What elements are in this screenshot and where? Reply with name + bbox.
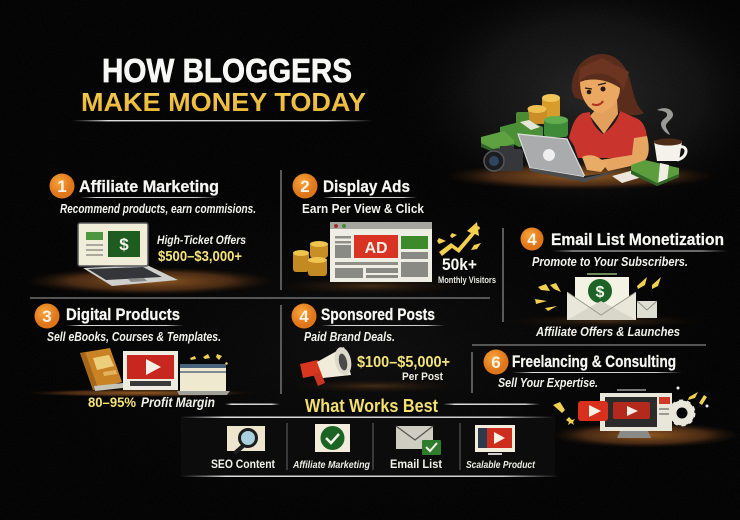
coin stacks and cash	[481, 94, 568, 152]
heading: Display Ads	[323, 178, 410, 196]
badge 4	[520, 228, 544, 250]
subtitle: Promote to Your Subscribers.	[532, 255, 688, 269]
caption: Affiliate Offers & Launches	[535, 324, 680, 339]
subtitle: Recommend products, earn commisions.	[60, 202, 256, 216]
icon: laptop with dollar	[78, 223, 178, 286]
cash stack and card	[612, 160, 679, 186]
badge 2	[292, 174, 318, 198]
badge 1	[50, 174, 74, 198]
subtitle: Sell eBooks, Courses & Templates.	[47, 330, 221, 344]
stat	[88, 394, 215, 410]
title	[72, 52, 373, 121]
stat: 50k+	[442, 255, 477, 274]
heading: Affiliate Marketing	[79, 178, 219, 196]
icon: coins	[293, 241, 328, 276]
panel: what works best	[180, 396, 560, 477]
icon: megaphone	[300, 346, 354, 386]
badge 3	[34, 304, 60, 328]
item: email list	[390, 426, 442, 471]
title: HOW BLOGGERS	[102, 52, 352, 89]
title: MAKE MONEY TODAY	[81, 87, 366, 117]
icon: laptop with dollar: $	[119, 235, 129, 254]
woman	[569, 54, 649, 172]
item: seo content: SEO Content	[211, 459, 275, 471]
badge 3: 3	[42, 307, 52, 326]
heading: Digital Products	[66, 306, 180, 324]
heading: Sponsored Posts	[321, 306, 435, 324]
icon: sparks	[535, 277, 661, 311]
dividers	[30, 170, 706, 394]
stat: $100–$5,000+	[357, 354, 450, 371]
subtitle: Paid Brand Deals.	[304, 330, 395, 344]
laptop	[518, 134, 622, 182]
panel: affiliate marketing	[25, 174, 275, 295]
badge 4: 4	[527, 230, 537, 249]
badge 4: 4	[299, 307, 309, 326]
offer text: High-Ticket Offers	[157, 235, 246, 247]
stat: 80–95%	[88, 394, 137, 410]
panel: display ads: Monthly Visitors	[438, 275, 496, 286]
icon: envelope with dollar	[567, 273, 657, 320]
panel: email list monetization	[505, 228, 728, 339]
heading: What Works Best	[305, 396, 438, 416]
icon: gear	[670, 401, 694, 425]
icon: monitor	[600, 389, 672, 438]
icon: growth arrow	[437, 222, 481, 256]
icon: browser with ad	[330, 222, 432, 282]
icon: video	[123, 351, 178, 390]
icon: envelope with dollar: $	[596, 284, 605, 301]
subtitle: Sell Your Expertise.	[498, 376, 598, 390]
camera	[484, 146, 523, 171]
illustration: blogger at desk	[445, 54, 715, 190]
panel: digital products	[25, 304, 280, 410]
panel: affiliate marketing: $500–$3,000+	[158, 249, 242, 265]
heading: Email List Monetization	[551, 231, 724, 249]
item: affiliate marketing	[292, 424, 370, 471]
item: scalable product: Scalable Product	[466, 460, 536, 471]
item: seo content	[211, 426, 275, 471]
item: scalable product	[466, 425, 536, 471]
icon: play button	[578, 401, 608, 421]
subtitle: Earn Per View & Click	[302, 201, 425, 216]
badge 6: 6	[491, 353, 501, 372]
panel: sponsored posts: Per Post	[402, 371, 443, 383]
heading: Freelancing & Consulting	[512, 353, 676, 371]
stat: Profit Margin	[141, 395, 215, 410]
desk	[445, 162, 715, 190]
icon: ebook	[80, 348, 123, 391]
badge 4	[292, 304, 316, 328]
panel: sponsored posts	[290, 304, 460, 393]
badge 2: 2	[300, 177, 310, 196]
coffee mug with steam	[654, 108, 686, 161]
item: email list: Email List	[390, 459, 442, 471]
icon: sparks	[553, 386, 708, 425]
badge 1: 1	[57, 177, 67, 196]
badge 6	[484, 350, 508, 374]
icon: browser with ad: AD	[364, 240, 388, 257]
icon: template laptop	[177, 354, 230, 395]
item: affiliate marketing: Affiliate Marketing	[292, 460, 370, 471]
panel: freelancing and consulting	[484, 350, 740, 448]
panel: display ads	[275, 174, 496, 295]
